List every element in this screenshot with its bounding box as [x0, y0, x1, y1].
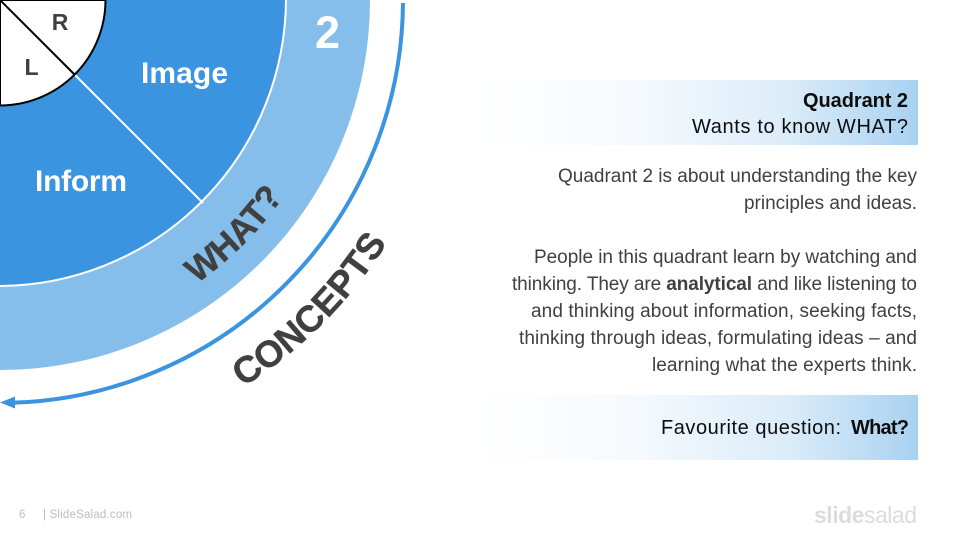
label: R: R [52, 9, 69, 35]
quadrant diagram [0, 0, 405, 408]
sector divider [75, 75, 203, 203]
heading title: Quadrant 2 [803, 90, 908, 112]
favourite question band [480, 395, 918, 460]
body paragraph: and thinking about information, seeking facts, [531, 301, 917, 322]
body paragraph: thinking through ideas, formulating ideas – and [519, 328, 917, 349]
brand logo: slidesalad [814, 502, 917, 528]
body paragraph: thinking. They are analytical and like listening to [512, 274, 917, 295]
footer site name: | SlideSalad.com [43, 509, 132, 521]
curved label: WHAT?: WHAT? [182, 186, 279, 280]
intro paragraph [558, 166, 918, 214]
curved label: CONCEPTS: CONCEPTS [234, 233, 384, 382]
centre divider [0, 0, 75, 75]
outer ring: what [0, 0, 370, 370]
footer page number: 6 [19, 509, 25, 521]
intro paragraph: Quadrant 2 is about understanding the key [558, 166, 918, 187]
body paragraph: People in this quadrant learn by watching and [534, 247, 917, 268]
heading band [480, 80, 918, 145]
body paragraph: learning what the experts think. [652, 355, 917, 376]
body paragraph [512, 247, 917, 376]
intro paragraph: principles and ideas. [744, 193, 917, 214]
label: Image: Image [141, 57, 228, 90]
favourite question label: Favourite question: [661, 417, 841, 439]
label: L: L [24, 54, 39, 80]
centre circle: left and right [0, 0, 106, 106]
curved arrow [0, 3, 403, 408]
label: Inform: Inform [35, 165, 127, 198]
favourite question answer: What? [851, 417, 909, 439]
heading subtitle: Wants to know WHAT? [692, 116, 908, 138]
inner quadrant: blue sectors [0, 0, 286, 286]
quadrant number: 2 [315, 7, 340, 58]
